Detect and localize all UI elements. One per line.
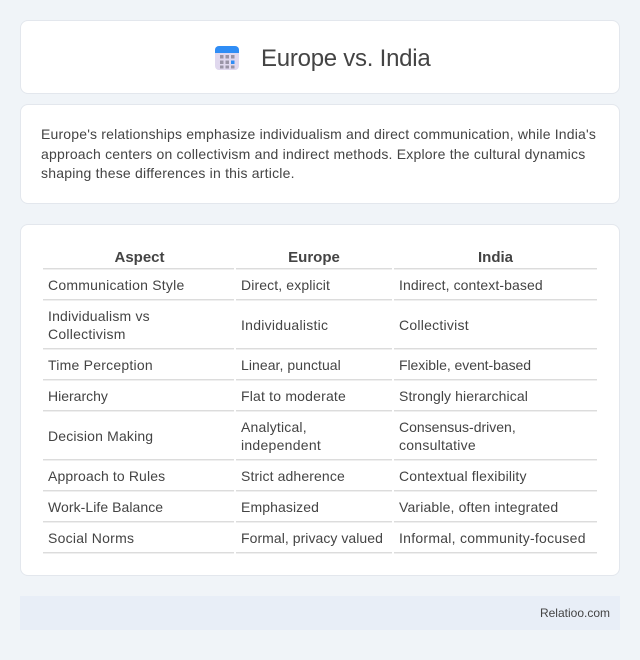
- table: comparison: Contextual flexibility: [399, 468, 527, 484]
- table: comparison: Individualism vs: [48, 308, 150, 324]
- table: comparison: independent: [241, 437, 321, 453]
- table: comparison: Strict adherence: [241, 468, 345, 484]
- table: comparison: Aspect: [114, 249, 165, 266]
- panel: header: [20, 20, 620, 94]
- table: comparison: Variable, often integrated: [399, 499, 558, 515]
- table: comparison: Work-Life Balance: [48, 499, 163, 515]
- title: Europe vs. India: [261, 45, 430, 72]
- table: comparison: Direct, explicit: [241, 277, 330, 293]
- table: comparison: Flat to moderate: [241, 388, 346, 404]
- text block: introduction: [41, 126, 596, 181]
- table: comparison: Approach to Rules: [48, 468, 165, 484]
- table: comparison: Indirect, context-based: [399, 277, 543, 293]
- table: comparison: Europe: [288, 249, 340, 266]
- text block: introduction: approach centers on collectivism and indirect methods. Explore the cultural dynamics: [41, 146, 585, 162]
- text block: introduction: shaping these differences in this article.: [41, 165, 295, 181]
- table: comparison: Flexible, event-based: [399, 357, 531, 373]
- table: comparison: Formal, privacy valued: [241, 530, 383, 546]
- table: comparison: Time Perception: [48, 357, 153, 373]
- footer bar: [20, 596, 620, 630]
- text block: introduction: Europe's relationships emphasize individualism and direct communication, while India's: [41, 126, 596, 142]
- table: comparison: Individualistic: [241, 317, 328, 333]
- table: comparison: Linear, punctual: [241, 357, 341, 373]
- table: comparison: Emphasized: [241, 499, 319, 515]
- table: comparison: Analytical,: [241, 419, 307, 435]
- table: comparison: Consensus-driven,: [399, 419, 516, 435]
- panel: comparison table: [20, 224, 620, 576]
- table: comparison: Decision Making: [48, 428, 153, 444]
- table: comparison: India: [478, 249, 513, 266]
- table: comparison: Strongly hierarchical: [399, 388, 528, 404]
- table: comparison: Informal, community-focused: [399, 530, 586, 546]
- panel: introduction: [20, 104, 620, 204]
- icon: calendar: [215, 46, 239, 70]
- table: comparison: Social Norms: [48, 530, 134, 546]
- table: comparison: Communication Style: [48, 277, 184, 293]
- table: comparison: Collectivism: [48, 326, 126, 342]
- table: comparison: Hierarchy: [48, 388, 108, 404]
- table: comparison: consultative: [399, 437, 476, 453]
- footer credit: Relatioo.com: [540, 606, 610, 620]
- table: comparison: Collectivist: [399, 317, 469, 333]
